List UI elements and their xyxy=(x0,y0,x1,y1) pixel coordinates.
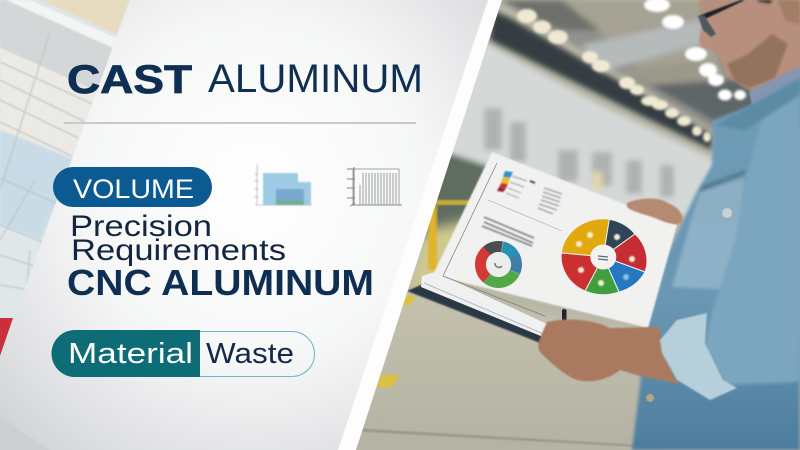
person in denim jacket xyxy=(632,0,800,450)
report document held open xyxy=(407,152,737,400)
icon: bar chart xyxy=(347,167,402,206)
yellow railing and floor xyxy=(340,200,660,450)
volume pill xyxy=(53,167,212,207)
binder xyxy=(407,284,556,346)
background photo: factory interior xyxy=(340,0,800,450)
material waste pill: Material xyxy=(68,338,193,370)
material waste pill xyxy=(51,330,314,377)
red accent xyxy=(0,318,13,356)
icon: area chart xyxy=(255,164,312,205)
main light panel xyxy=(0,0,488,450)
tile band xyxy=(0,48,105,160)
donut chart xyxy=(473,239,524,290)
large pie chart xyxy=(561,219,647,295)
head xyxy=(699,0,800,92)
text: precision requirements xyxy=(70,210,286,267)
title: cast aluminum: ALUMINUM xyxy=(208,57,423,101)
jacket button xyxy=(646,394,654,402)
jacket pocket xyxy=(672,170,745,290)
heading: cnc aluminum: CNC ALUMINUM xyxy=(67,262,374,303)
material waste pill: Waste xyxy=(206,338,294,370)
concrete wall xyxy=(0,0,116,95)
text: precision requirements: Precision xyxy=(70,210,212,243)
title: cast aluminum: CAST xyxy=(67,58,192,102)
building wall xyxy=(420,40,715,240)
legend colour blocks xyxy=(497,171,562,214)
striped shirt collar xyxy=(749,66,800,106)
white diagonal band xyxy=(336,0,502,450)
sleeve xyxy=(705,85,800,385)
pen xyxy=(562,309,566,321)
caption lines xyxy=(482,217,534,246)
text: precision requirements: Requirements xyxy=(71,234,286,267)
ceiling xyxy=(490,0,800,150)
glasses xyxy=(698,0,745,37)
volume pill: VOLUME xyxy=(73,174,194,204)
blue glass band xyxy=(0,130,75,240)
top hand xyxy=(627,198,682,224)
rolled cuff xyxy=(660,313,737,400)
left background: architectural window xyxy=(0,0,150,450)
beige wall xyxy=(42,0,130,34)
divider line xyxy=(64,122,416,124)
jacket body xyxy=(632,78,800,450)
bottom hand and forearm xyxy=(538,320,680,384)
title: cast aluminum xyxy=(67,57,423,102)
ceiling lights xyxy=(517,0,746,142)
page xyxy=(433,152,677,328)
